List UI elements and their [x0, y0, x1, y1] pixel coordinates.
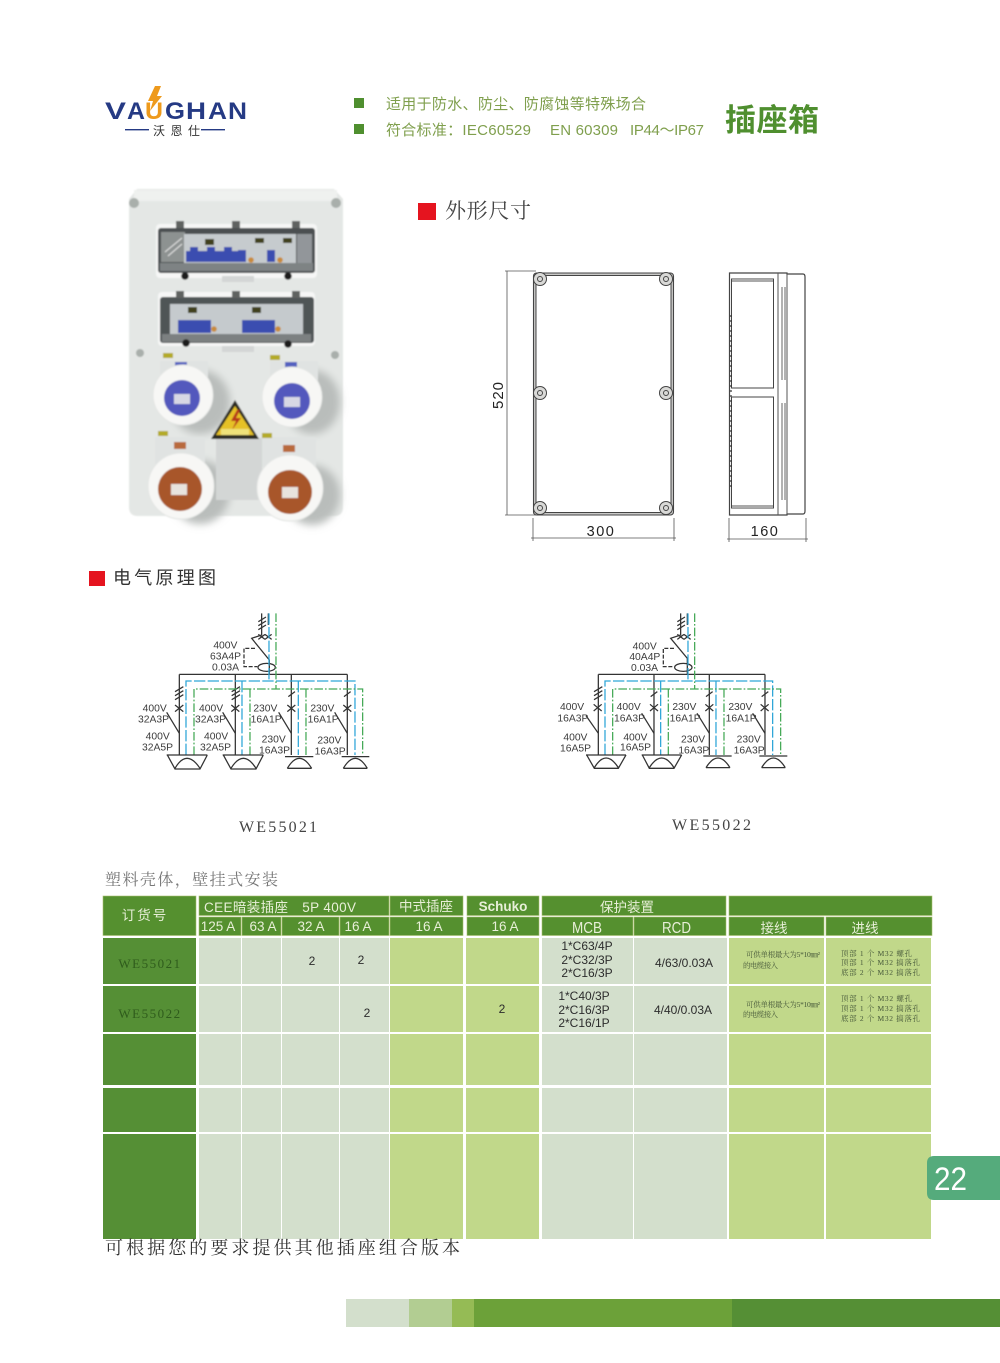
row WE55021: 可供单根最大为5*10㎜² [746, 949, 821, 959]
schematic WE55021: 16A3P [259, 746, 290, 757]
row WE55022 [118, 989, 920, 1030]
schematic WE55021: 16A1P [308, 714, 339, 725]
schematic WE55022: 400V [617, 702, 641, 713]
dimension drawing: front view [490, 271, 676, 541]
footnote: 可根据您的要求提供其他插座组合版本 [105, 1237, 460, 1258]
feature bullets: 符合标准：IEC60529 [386, 122, 531, 139]
dimension drawing: front view: 520 [490, 381, 507, 409]
table header [103, 896, 932, 937]
page number tab: 22 [934, 1161, 967, 1197]
schematic WE55022: 400V [560, 702, 584, 713]
schematic WE55022: 16A3P [614, 713, 645, 724]
row WE55021: 的电缆接入 [743, 960, 778, 970]
table body cells [103, 938, 931, 1239]
table header: 32 A [297, 919, 325, 934]
table caption: 塑料壳体，壁挂式安装 [105, 871, 278, 889]
schematic WE55021: 400V [204, 732, 228, 743]
row WE55022: 底部 2 个 M32 搞落孔 [841, 1013, 920, 1023]
breaker window 1 [156, 221, 317, 282]
row WE55021: 顶部 1 个 M32 螺孔 [841, 948, 912, 958]
heading: outline dimensions: 外形尺寸 [445, 199, 531, 223]
schematic WE55022: 400V [633, 641, 657, 652]
schematic WE55021: 230V [262, 735, 286, 746]
table header: CEE暗装插座 5P 400V [204, 900, 356, 915]
schematic WE55022: 400V [623, 733, 648, 744]
row WE55021: 顶部 1 个 M32 搞落孔 [841, 957, 920, 967]
heading: electrical schematic: 电气原理图 [113, 568, 216, 588]
row WE55021 [118, 939, 920, 980]
schematic WE55021: 32A3P [195, 714, 226, 725]
schematic WE55021: 400V [213, 641, 238, 652]
row WE55021: 1*C63/4P [561, 939, 613, 953]
row WE55021: 2 [358, 953, 365, 967]
row WE55021: 底部 2 个 M32 搞落孔 [841, 967, 920, 977]
row WE55022: 2*C16/3P [558, 1003, 610, 1017]
warning triangle [211, 400, 259, 439]
feature bullets: 适用于防水、防尘、防腐蚀等特殊场合 [386, 95, 646, 113]
row WE55021: 2*C16/3P [561, 966, 613, 980]
schematic WE55021 [138, 613, 369, 769]
logo: Vaughan: A [127, 98, 145, 125]
product photo: socket box [129, 189, 343, 525]
page number tab [927, 1156, 1000, 1200]
table header: 63 A [249, 919, 277, 934]
warning labels [158, 353, 280, 438]
model label WE55021: WE55021 [239, 819, 317, 836]
schematic WE55021: 63A4P [210, 652, 241, 663]
schematic WE55022: 230V [737, 735, 761, 746]
row WE55022: 1*C40/3P [558, 989, 610, 1003]
schematic WE55021: 32A5P [200, 743, 231, 754]
table header: MCB [572, 920, 602, 937]
schematic WE55021: 400V [143, 703, 167, 714]
model label WE55022: WE55022 [672, 817, 751, 834]
specification table [103, 896, 932, 1239]
feature bullets: IP44～IP67 [630, 122, 704, 139]
logo: Vaughan: G [165, 98, 185, 125]
blue sockets [153, 361, 322, 427]
orange sockets [148, 437, 323, 521]
row WE55022: WE55022 [118, 1006, 182, 1021]
logo: Vaughan: A [208, 98, 227, 125]
table header: 接线 [760, 920, 788, 936]
schematic WE55021: 16A3P [315, 746, 346, 757]
schematic WE55022: 0.03A [631, 663, 658, 674]
table header: 中式插座 [399, 899, 453, 914]
schematic WE55021: 230V [317, 735, 342, 746]
schematic WE55021: 0.03A [212, 663, 239, 674]
row WE55022: 4/40/0.03A [654, 1003, 712, 1017]
schematic WE55022: 16A1P [670, 713, 701, 724]
table header: RCD [662, 920, 691, 937]
row WE55022: 顶部 1 个 M32 搞落孔 [841, 1003, 920, 1013]
row WE55022: 2 [499, 1002, 506, 1016]
schematic WE55021: 230V [253, 703, 278, 714]
logo: Vaughan [105, 86, 247, 138]
schematic WE55022: 16A5P [560, 744, 591, 755]
schematic WE55022: 230V [728, 702, 753, 713]
row WE55021: 2 [309, 954, 316, 968]
feature bullets [354, 95, 704, 139]
product title: 插座箱 [725, 103, 819, 138]
schematic WE55021: 32A3P [138, 714, 169, 725]
row WE55022: 的电缆接入 [743, 1009, 778, 1019]
table header: 125 A [201, 919, 235, 934]
schematic WE55021: 16A1P [251, 714, 282, 725]
schematic WE55021: 400V [199, 703, 223, 714]
feature bullets: EN 60309 [550, 122, 618, 139]
row WE55021: WE55021 [118, 956, 182, 971]
breaker window 2 [158, 291, 315, 352]
table header: 订货号 [122, 907, 168, 923]
schematic WE55022 [557, 613, 787, 768]
footer colour bar [346, 1299, 1000, 1327]
row WE55022: 可供单根最大为5*10㎜² [746, 999, 821, 1009]
table header: Schuko [479, 899, 527, 914]
schematic WE55022: 230V [681, 735, 705, 746]
table header: 保护装置 [600, 900, 654, 915]
logo: Vaughan: 沃恩仕 [153, 124, 200, 138]
schematic WE55021: 230V [310, 703, 335, 714]
dimension drawing: front view: 300 [587, 524, 615, 540]
row WE55021: 4/63/0.03A [655, 956, 713, 970]
schematic WE55021: 400V [146, 732, 170, 743]
row WE55022: 2 [364, 1006, 371, 1020]
schematic WE55022: 16A3P [734, 746, 765, 757]
table header: 16 A [491, 919, 519, 934]
row WE55021: 2*C32/3P [561, 953, 613, 967]
socket shadows [170, 370, 340, 525]
table header: 进线 [852, 921, 878, 936]
schematic WE55021: 32A5P [142, 743, 173, 754]
row WE55022: 顶部 1 个 M32 螺孔 [841, 993, 912, 1003]
schematic WE55022: 40A4P [629, 652, 660, 663]
schematic WE55022: 400V [563, 733, 588, 744]
schematic WE55022: 16A3P [678, 746, 709, 757]
table header: 16 A [344, 919, 372, 934]
dimension drawing: side view [727, 273, 808, 542]
table header: 16 A [415, 919, 443, 934]
schematic WE55022: 16A1P [726, 713, 757, 724]
logo: Vaughan: U [145, 98, 163, 125]
logo: Vaughan: N [228, 98, 247, 125]
schematic WE55022: 16A5P [620, 743, 651, 754]
logo: Vaughan: H [186, 98, 206, 125]
schematic WE55022: 16A3P [557, 713, 588, 724]
schematic WE55022: 230V [672, 702, 697, 713]
row WE55022: 2*C16/1P [558, 1016, 610, 1030]
dimension drawing: side view: 160 [751, 524, 779, 540]
logo: Vaughan: V [105, 98, 126, 125]
